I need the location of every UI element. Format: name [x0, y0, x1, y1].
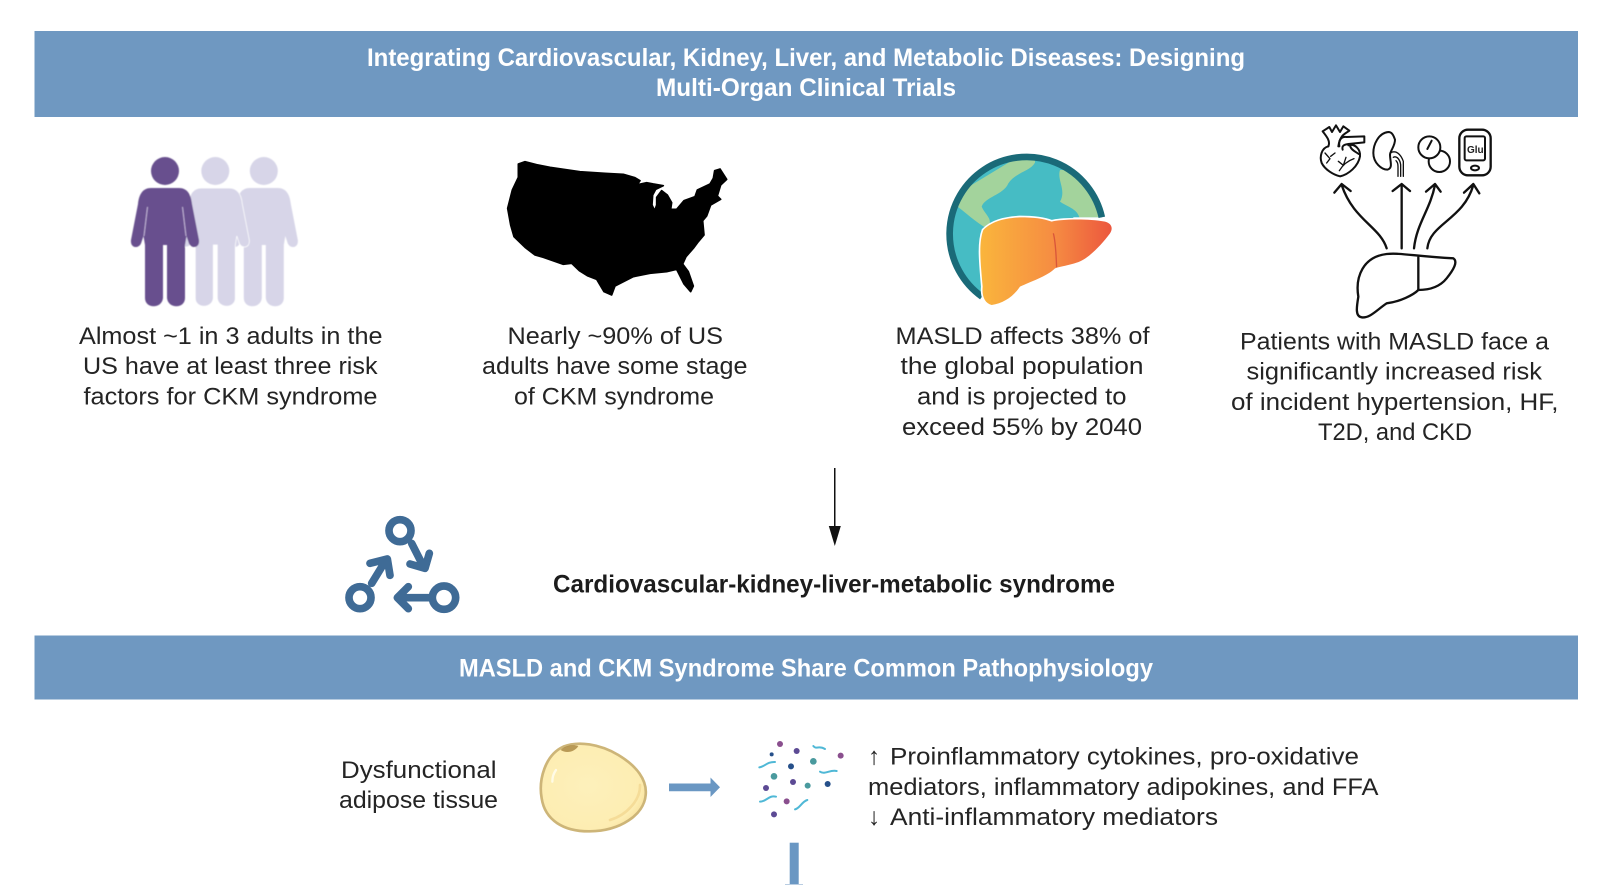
text: dysfunctional adipose tissue: adipose tissue — [339, 787, 498, 814]
text: global MASLD statistic: and is projected to — [917, 384, 1126, 410]
text: mediator changes: ↓ — [868, 804, 880, 831]
text: mediator changes: ↑ — [868, 744, 880, 770]
icon: globe with liver — [950, 147, 1120, 305]
text: CKM stage statistic: Nearly ~90% of US — [508, 323, 723, 350]
icon: cycle of linked nodes — [349, 520, 456, 609]
text: mediator changes — [868, 744, 1379, 831]
section banner: shared pathophysiology — [34, 636, 1578, 700]
icon: adipocyte cell — [541, 744, 646, 831]
text: incident risk statement — [1231, 328, 1558, 446]
text: risk factors statistic: US have at least three risk — [83, 353, 378, 380]
text: global MASLD statistic: the global population — [900, 353, 1144, 380]
text: CKM stage statistic: adults have some stage — [482, 353, 748, 380]
arrow: down to syndrome — [829, 468, 841, 546]
text: mediator changes: mediators, inflammatory adipokines, and FFA — [868, 774, 1379, 801]
section banner: shared pathophysiology: MASLD and CKM Syndrome Share Common Pathophysiology — [459, 654, 1153, 682]
title — [367, 44, 1245, 102]
icon: scattered inflammatory mediators — [759, 741, 844, 817]
liver — [980, 217, 1112, 305]
text: incident risk statement: T2D, and CKD — [1318, 419, 1472, 446]
text: incident risk statement: of incident hypertension, HF, — [1231, 389, 1558, 416]
text: dysfunctional adipose tissue — [339, 757, 498, 814]
icon: liver with arrows to organs — [1321, 125, 1491, 317]
text: CKM stage statistic — [482, 323, 748, 410]
text: risk factors statistic — [79, 323, 382, 410]
arrows from liver to organs — [1334, 184, 1479, 248]
text: dysfunctional adipose tissue: Dysfunctional — [341, 757, 496, 784]
arrow: adipose to mediators — [669, 778, 720, 797]
text: incident risk statement: significantly increased risk — [1246, 358, 1543, 386]
text: risk factors statistic: factors for CKM syndrome — [84, 384, 378, 410]
icon: US map — [508, 162, 727, 295]
text: incident risk statement: Patients with MASLD face a — [1240, 328, 1549, 356]
outline liver — [1357, 254, 1455, 317]
title: Integrating Cardiovascular, Kidney, Liver, and Metabolic Diseases: Designing — [367, 44, 1245, 72]
kidney — [1373, 132, 1403, 176]
text: mediator changes: Proinflammatory cytokines, pro-oxidative — [890, 744, 1359, 770]
text: global MASLD statistic: exceed 55% by 2040 — [902, 414, 1142, 441]
text: CKM stage statistic: of CKM syndrome — [514, 384, 714, 410]
heart — [1321, 125, 1364, 176]
text: global MASLD statistic — [896, 323, 1150, 441]
blood pressure gauge — [1418, 136, 1450, 172]
title banner — [34, 31, 1578, 117]
glucose meter: Glu — [1467, 145, 1484, 156]
heading: combined syndrome: Cardiovascular-kidney-liver-metabolic syndrome — [553, 570, 1115, 598]
text: mediator changes: Anti-inflammatory mediators — [890, 804, 1218, 831]
text: global MASLD statistic: MASLD affects 38% of — [896, 323, 1150, 350]
arrow: downward to next section — [785, 843, 803, 885]
icon: three people, one highlighted — [131, 157, 298, 306]
text: risk factors statistic: Almost ~1 in 3 adults in the — [79, 323, 382, 350]
title: Multi-Organ Clinical Trials — [656, 74, 956, 102]
